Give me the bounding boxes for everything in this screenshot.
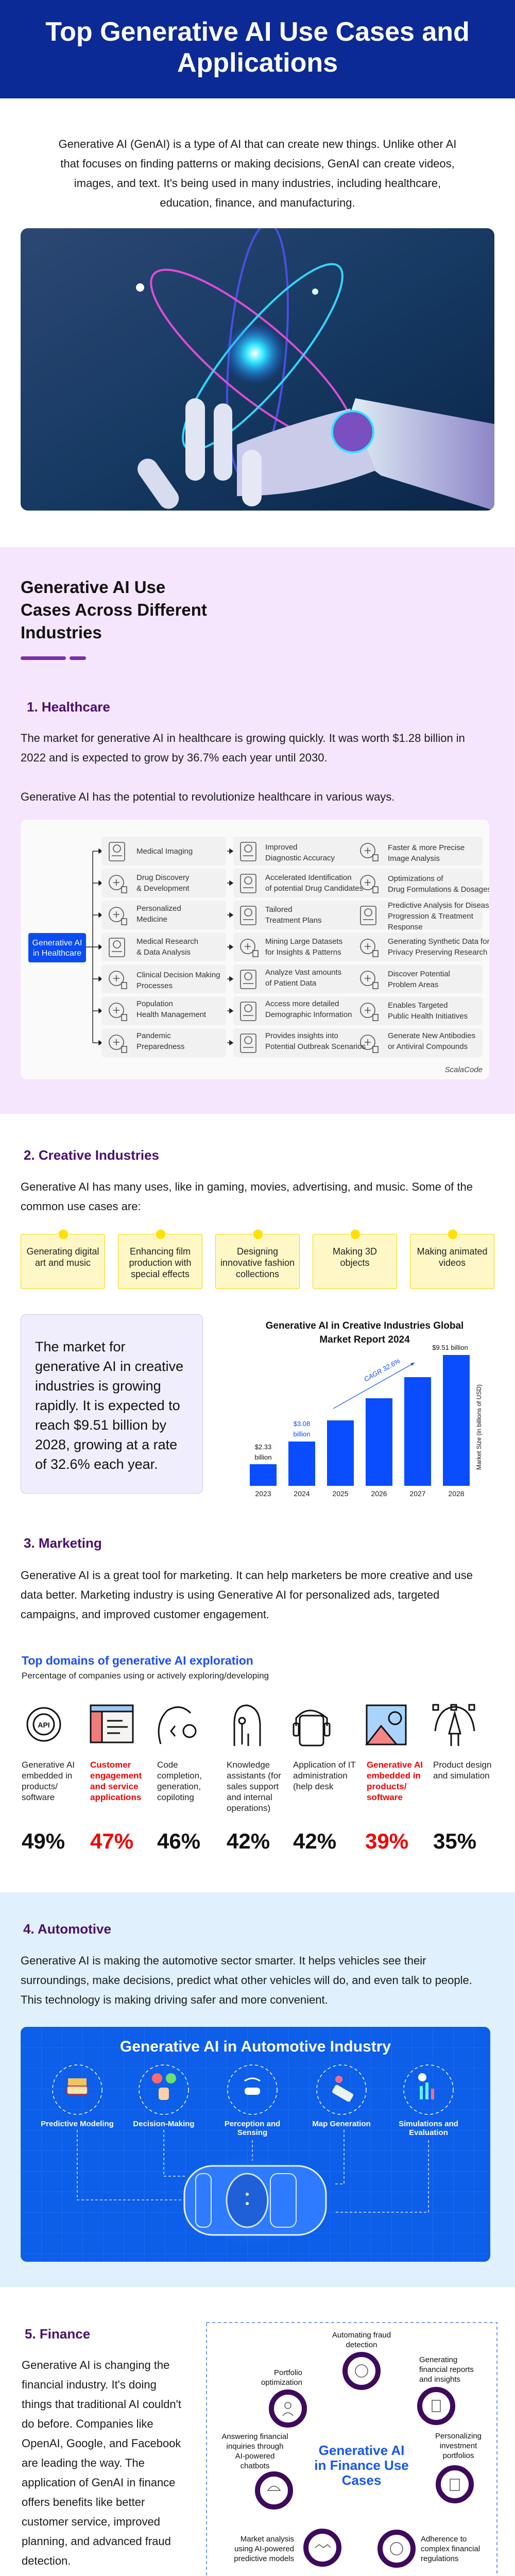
automotive infographic card: Map Generation	[312, 2120, 371, 2128]
heading: use cases across industries: Cases Across Different	[21, 600, 207, 619]
creative market callout: of 32.6% each year.	[35, 1456, 158, 1472]
marketing domain labels: Product design	[433, 1760, 491, 1770]
automotive infographic card: Evaluation	[409, 2128, 448, 2137]
healthcare chart card	[21, 820, 489, 1079]
row texts: Problem Areas	[388, 980, 438, 989]
finance use cases diagram: using AI-powered	[234, 2545, 294, 2553]
row boxes	[101, 837, 483, 1057]
marketing domain labels: completion,	[157, 1771, 202, 1781]
marketing domain labels: Generative AI	[22, 1760, 75, 1770]
intro text: images, and text. It's being used in many industries, including healthcare,	[74, 177, 441, 190]
finance use cases diagram: optimization	[261, 2378, 302, 2387]
header banner	[0, 0, 515, 98]
finance use cases diagram: investment	[440, 2442, 477, 2450]
intro text: education, finance, and manufacturing.	[160, 196, 355, 209]
marketing chart subtitle: Percentage of companies using or actively exploring/developing	[22, 1671, 269, 1681]
finance text: do before. Companies like	[22, 2417, 153, 2430]
finance text: detection.	[22, 2554, 71, 2567]
automotive text	[21, 1954, 472, 2006]
finance use cases diagram: chatbots	[241, 2462, 269, 2470]
card: 3D: Making 3D	[333, 1246, 377, 1257]
marketing domain labels: products/	[22, 1782, 58, 1791]
marketing percentages: 49%	[22, 1829, 65, 1853]
title: Applications	[177, 48, 338, 78]
marketing percentages	[22, 1829, 476, 1853]
row texts: Improved	[265, 843, 298, 852]
marketing percentages: 46%	[157, 1829, 200, 1853]
card: animated: videos	[439, 1258, 466, 1268]
marketing percentages: 47%	[90, 1829, 133, 1853]
row texts: Access more detailed	[265, 999, 339, 1008]
finance use cases diagram: financial reports	[419, 2365, 474, 2374]
row texts: Tailored	[265, 905, 293, 914]
finance use cases diagram: Generating	[419, 2355, 457, 2364]
marketing domain labels: embedded in	[367, 1771, 421, 1781]
card: film: production with	[129, 1258, 192, 1268]
creative text	[21, 1180, 473, 1213]
marketing domain labels: (help desk	[293, 1782, 333, 1791]
finance use cases diagram: Portfolio	[274, 2368, 302, 2377]
creative market callout: industries is growing	[35, 1378, 161, 1394]
row texts: Clinical Decision Making	[136, 971, 220, 979]
row texts: for Insights & Patterns	[265, 948, 341, 957]
heading: use cases across industries	[21, 578, 207, 642]
card: film: Enhancing film	[130, 1246, 191, 1257]
marketing domain labels: Application of IT	[293, 1760, 356, 1770]
card: 3D	[313, 1234, 397, 1289]
row texts: Progression & Treatment	[388, 912, 474, 921]
creative market callout: reach $9.51 billion by	[35, 1417, 166, 1433]
card: film	[118, 1234, 202, 1289]
marketing domain labels: Code	[157, 1760, 178, 1770]
finance use cases diagram: and insights	[419, 2375, 460, 2384]
healthcare text: 2022 and is expected to grow by 36.7% each year until 2030.	[21, 751, 328, 764]
finance use cases diagram: predictive models	[234, 2554, 294, 2563]
automotive text: Generative AI is making the automotive sector smarter. It helps vehicles see their	[21, 1954, 426, 1967]
marketing text: Generative AI is a great tool for marketing. It can help marketers be more creative and use	[21, 1569, 473, 1582]
marketing text: campaigns, and improved customer engagement.	[21, 1608, 269, 1621]
creative text: common use cases are:	[21, 1200, 141, 1213]
heading underline bars	[21, 656, 86, 660]
row texts: Generate New Antibodies	[388, 1031, 475, 1040]
creative bar chart: Market Report 2024	[319, 1334, 410, 1345]
marketing domain labels: engagement	[90, 1771, 142, 1781]
card: 3D: objects	[340, 1258, 370, 1268]
automotive infographic card: Sensing	[237, 2128, 267, 2137]
creative bar chart: Market Size (in billions of USD)	[475, 1384, 483, 1470]
heading: 4. Automotive: 4. Automotive	[23, 1921, 111, 1937]
card: digital art: Generating digital	[26, 1246, 99, 1257]
automotive text: This technology is making driving safer and more convenient.	[21, 1993, 328, 2006]
row texts: Potential Outbreak Scenarios	[265, 1042, 366, 1051]
marketing domain labels: software	[22, 1792, 55, 1802]
row texts: Response	[388, 923, 423, 931]
marketing domain labels: Knowledge	[227, 1760, 270, 1770]
creative bar chart: $3.08	[294, 1420, 310, 1428]
automotive infographic card: Predictive Modeling	[41, 2120, 114, 2128]
finance use cases diagram: portfolios	[443, 2451, 474, 2460]
intro text: Generative AI (GenAI) is a type of AI that can create new things. Unlike other AI	[59, 138, 456, 150]
marketing icons	[27, 1704, 475, 1747]
marketing percentages: 42%	[227, 1829, 270, 1853]
row texts: Drug Formulations & Dosages	[388, 885, 489, 894]
row texts: Population	[136, 999, 173, 1008]
heading: 5. Finance: 5. Finance	[25, 2326, 90, 2342]
creative bar chart	[250, 1320, 483, 1498]
row texts: Privacy Preserving Research	[388, 948, 487, 957]
row texts: Demographic Information	[265, 1010, 352, 1019]
finance use cases diagram: regulations	[421, 2554, 458, 2563]
row texts: Public Health Initiatives	[388, 1012, 468, 1021]
marketing domain labels: and simulation	[433, 1771, 490, 1781]
automotive infographic card	[21, 2027, 490, 2262]
finance use cases diagram: complex financial	[421, 2545, 480, 2553]
marketing domain labels: sales support	[227, 1782, 279, 1791]
card: digital art: art and music	[35, 1258, 91, 1268]
row texts: Image Analysis	[388, 854, 440, 863]
marketing domain labels: generation,	[157, 1782, 201, 1791]
creative bar chart: billion	[293, 1430, 311, 1438]
marketing percentages: 39%	[365, 1829, 408, 1853]
row texts: Provides insights into	[265, 1031, 338, 1040]
heading: 1. Healthcare: 1. Healthcare	[27, 699, 110, 715]
watermark: ScalaCode	[445, 1065, 483, 1074]
row texts: Drug Discovery	[136, 873, 190, 882]
card: animated: Making animated	[417, 1246, 488, 1257]
row texts: Discover Potential	[388, 970, 450, 978]
finance text	[22, 2359, 181, 2567]
finance use cases diagram: in Finance Use	[314, 2458, 409, 2473]
creative bar chart: 2026	[371, 1489, 387, 1498]
automotive text: surroundings, make decisions, predict what other vehicles will do, and even talk to people.	[21, 1974, 472, 1987]
card: fashion: innovative fashion	[220, 1258, 295, 1268]
marketing domain labels: assistants (for	[227, 1771, 281, 1781]
creative bar chart: $9.51 billion	[432, 1344, 468, 1351]
finance use cases diagram: Market analysis	[241, 2535, 294, 2544]
finance use cases diagram: detection	[346, 2341, 377, 2349]
finance text: things that traditional AI couldn't	[22, 2398, 181, 2411]
row texts: Treatment Plans	[265, 916, 321, 925]
finance use cases diagram: inquiries through	[227, 2442, 283, 2451]
card: fashion: Designing	[237, 1246, 278, 1257]
creative market callout: The market for	[35, 1339, 126, 1354]
row texts: of potential Drug Candidates	[265, 884, 363, 893]
marketing percentages: 42%	[293, 1829, 336, 1853]
heading: use cases across industries: Generative AI Use	[21, 578, 165, 597]
finance use cases diagram	[206, 2322, 497, 2575]
icon: pen tool	[433, 1705, 474, 1746]
creative use case cards	[21, 1229, 494, 1289]
icon: head circuit	[234, 1705, 260, 1746]
healthcare text 2: Generative AI has the potential to revolutionize healthcare in various ways.	[21, 790, 394, 803]
healthcare text: The market for generative AI in healthcare is growing quickly. It was worth $1.28 billion in	[21, 732, 465, 744]
finance text: planning, and advanced fraud	[22, 2535, 171, 2548]
creative bar chart: $2.33	[255, 1443, 271, 1451]
creative market callout: 2028, growing at a rate	[35, 1437, 177, 1452]
row texts: & Data Analysis	[136, 948, 191, 957]
central box	[28, 933, 86, 962]
card: fashion	[215, 1234, 300, 1289]
creative bar chart: 2028	[448, 1489, 465, 1498]
marketing domain labels: administration	[293, 1771, 348, 1781]
row texts: Processes	[136, 981, 173, 990]
row texts: Medicine	[136, 915, 167, 924]
title: Top Generative AI Use Cases and	[45, 17, 470, 47]
marketing chart heading: Top domains of generative AI exploration	[22, 1654, 253, 1667]
finance use cases diagram: Answering financial	[221, 2432, 288, 2441]
marketing domain labels: applications	[90, 1792, 141, 1802]
row texts: Enables Targeted	[388, 1001, 448, 1010]
row texts: Medical Research	[136, 937, 198, 946]
marketing percentages: 35%	[433, 1829, 476, 1853]
finance use cases diagram: Generative AI	[319, 2443, 404, 2458]
finance use cases diagram: Adherence to	[421, 2535, 467, 2544]
finance use cases diagram: AI-powered	[235, 2452, 274, 2461]
heading: 2. Creative Industries: 2. Creative Industries	[24, 1147, 159, 1163]
marketing domain labels: Generative AI	[367, 1760, 423, 1770]
section background: automotive	[0, 1892, 515, 2287]
marketing domain labels: products/	[367, 1782, 406, 1791]
marketing text	[21, 1569, 473, 1621]
central box: Generative AI	[32, 939, 82, 947]
card: digital art	[21, 1234, 105, 1289]
finance text: offers benefits like better	[22, 2496, 145, 2509]
automotive infographic card: Perception and	[225, 2120, 280, 2128]
row texts: Accelerated Identification	[265, 873, 352, 882]
creative market callout	[21, 1314, 203, 1494]
creative bar chart: 2025	[332, 1489, 349, 1498]
tree connector	[86, 849, 233, 1045]
finance text: customer service, improved	[22, 2515, 160, 2528]
creative bar chart: billion	[254, 1453, 272, 1461]
icon: head gear	[159, 1707, 196, 1744]
finance text: Generative AI is changing the	[22, 2359, 169, 2371]
row texts: Generating Synthetic Data for	[388, 937, 489, 946]
row texts: Analyze Vast amounts	[265, 968, 341, 977]
marketing domain labels: and internal	[227, 1792, 272, 1802]
row texts: Mining Large Datasets	[265, 937, 342, 946]
row texts: or Antiviral Compounds	[388, 1042, 468, 1051]
creative bar chart: CAGR 32.6%	[363, 1357, 402, 1383]
finance text: financial industry. It's doing	[22, 2378, 157, 2391]
intro text	[59, 138, 456, 209]
creative bar chart: 2023	[255, 1489, 271, 1498]
heading: 3. Marketing: 3. Marketing	[24, 1535, 102, 1551]
icon: code window	[91, 1705, 133, 1742]
row texts: Diagnostic Accuracy	[265, 854, 335, 862]
hero image: robot hand with atom	[21, 228, 494, 511]
icon: image	[367, 1705, 406, 1744]
marketing text: data better. Marketing industry is using Generative AI for personalized ads, targeted	[21, 1588, 439, 1601]
finance use cases diagram: Cases	[342, 2472, 381, 2488]
row icons	[109, 842, 378, 1053]
creative bar chart: 2027	[409, 1489, 426, 1498]
creative market callout: generative AI in creative	[35, 1359, 183, 1374]
marketing domain labels	[22, 1760, 491, 1813]
finance text: OpenAI, Google, and Facebook	[22, 2437, 181, 2450]
row texts: & Development	[136, 884, 190, 893]
marketing domain labels: software	[367, 1792, 403, 1802]
automotive infographic card: Generative AI in Automotive Industry	[120, 2038, 391, 2055]
creative market callout: rapidly. It is expected to	[35, 1398, 180, 1413]
row texts: Personalized	[136, 904, 181, 913]
healthcare text	[21, 732, 465, 764]
icon: API gear: API	[38, 1721, 50, 1729]
marketing domain labels: copiloting	[157, 1792, 194, 1802]
row texts: Medical Imaging	[136, 847, 193, 856]
marketing domain labels: and service	[90, 1782, 139, 1791]
icon: headset	[294, 1710, 330, 1745]
heading: use cases across industries: Industries	[21, 623, 102, 642]
finance text: application of GenAI in finance	[22, 2476, 175, 2489]
row texts: of Patient Data	[265, 979, 317, 988]
icon: API gear	[27, 1708, 60, 1741]
marketing domain labels: embedded in	[22, 1771, 72, 1781]
card: film: special effects	[131, 1269, 190, 1279]
row texts: Health Management	[136, 1010, 207, 1019]
creative text: Generative AI has many uses, like in gaming, movies, advertising, and music. Some of the	[21, 1180, 473, 1193]
title	[45, 17, 470, 78]
row texts: Pandemic	[136, 1031, 171, 1040]
intro text: that focuses on finding patterns or making decisions, GenAI can create videos,	[60, 157, 455, 170]
card: fashion: collections	[236, 1269, 279, 1279]
automotive infographic card: Decision-Making	[133, 2120, 195, 2128]
row texts: Faster & more Precise	[388, 843, 465, 852]
finance use cases diagram: Personalizing	[435, 2432, 482, 2441]
row texts: Optimizations of	[388, 874, 443, 883]
row texts: Preparedness	[136, 1042, 184, 1051]
row texts	[136, 843, 493, 1051]
finance text: are leading the way. The	[22, 2456, 145, 2469]
card: animated	[410, 1234, 494, 1289]
creative bar chart: 2024	[294, 1489, 310, 1498]
finance use cases diagram: Automating fraud	[332, 2331, 391, 2340]
section background: industries	[0, 547, 515, 1114]
central box: in Healthcare	[33, 949, 81, 958]
marketing domain labels: Customer	[90, 1760, 131, 1770]
creative bar chart: Generative AI in Creative Industries Global	[266, 1320, 464, 1331]
marketing domain labels: operations)	[227, 1803, 270, 1813]
automotive infographic card: Simulations and	[399, 2120, 458, 2128]
